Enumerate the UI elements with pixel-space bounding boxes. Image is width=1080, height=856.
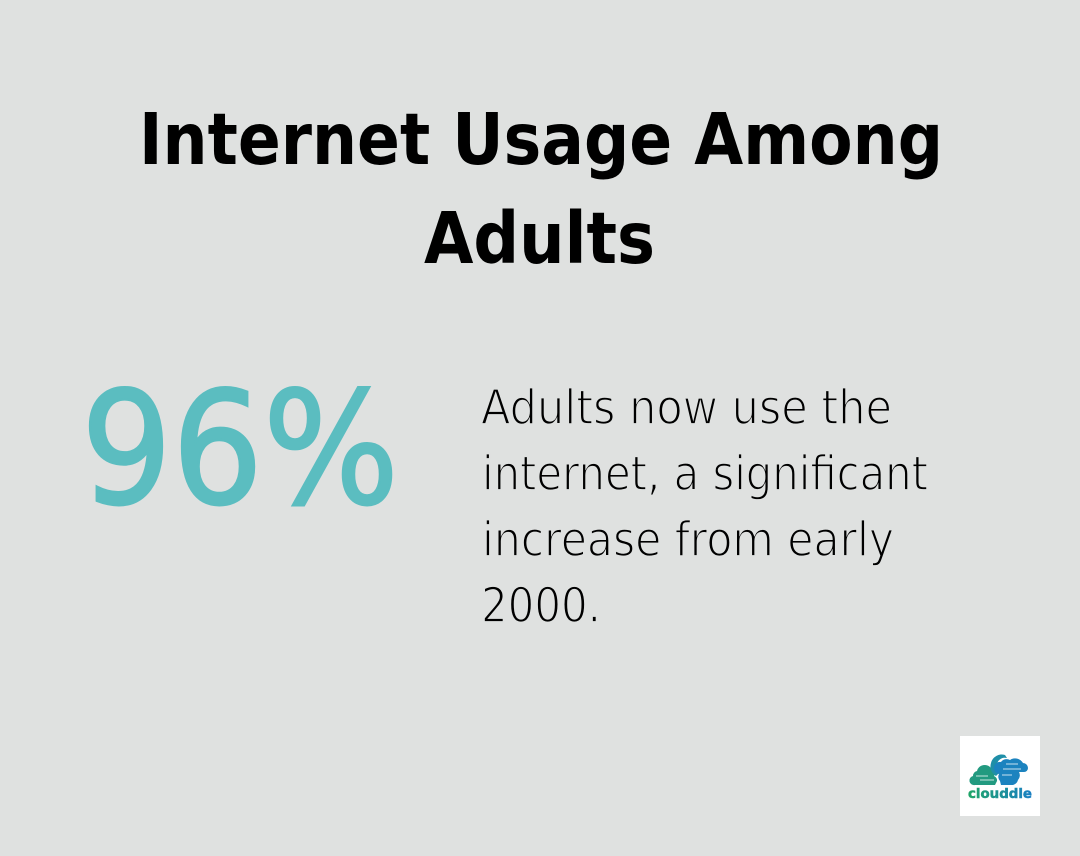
description text [481,380,928,634]
description text: increase from early [482,512,894,568]
icon: cloud circuit lines [976,764,1021,780]
logo: clouddle [960,736,1040,816]
statistic: 96%: 96% [81,358,399,540]
description text: Adults now use the [481,380,892,436]
title: Adults [424,197,655,280]
icon: right cloud [994,758,1028,785]
description text: 2000. [481,578,601,634]
title [139,98,943,280]
description text: internet, a significant [482,446,928,502]
icon: left cloud [969,765,997,785]
logo wordmark: clouddle [968,786,1032,802]
title: Internet Usage Among [139,98,943,181]
icon: crescent cloud [990,754,1007,776]
